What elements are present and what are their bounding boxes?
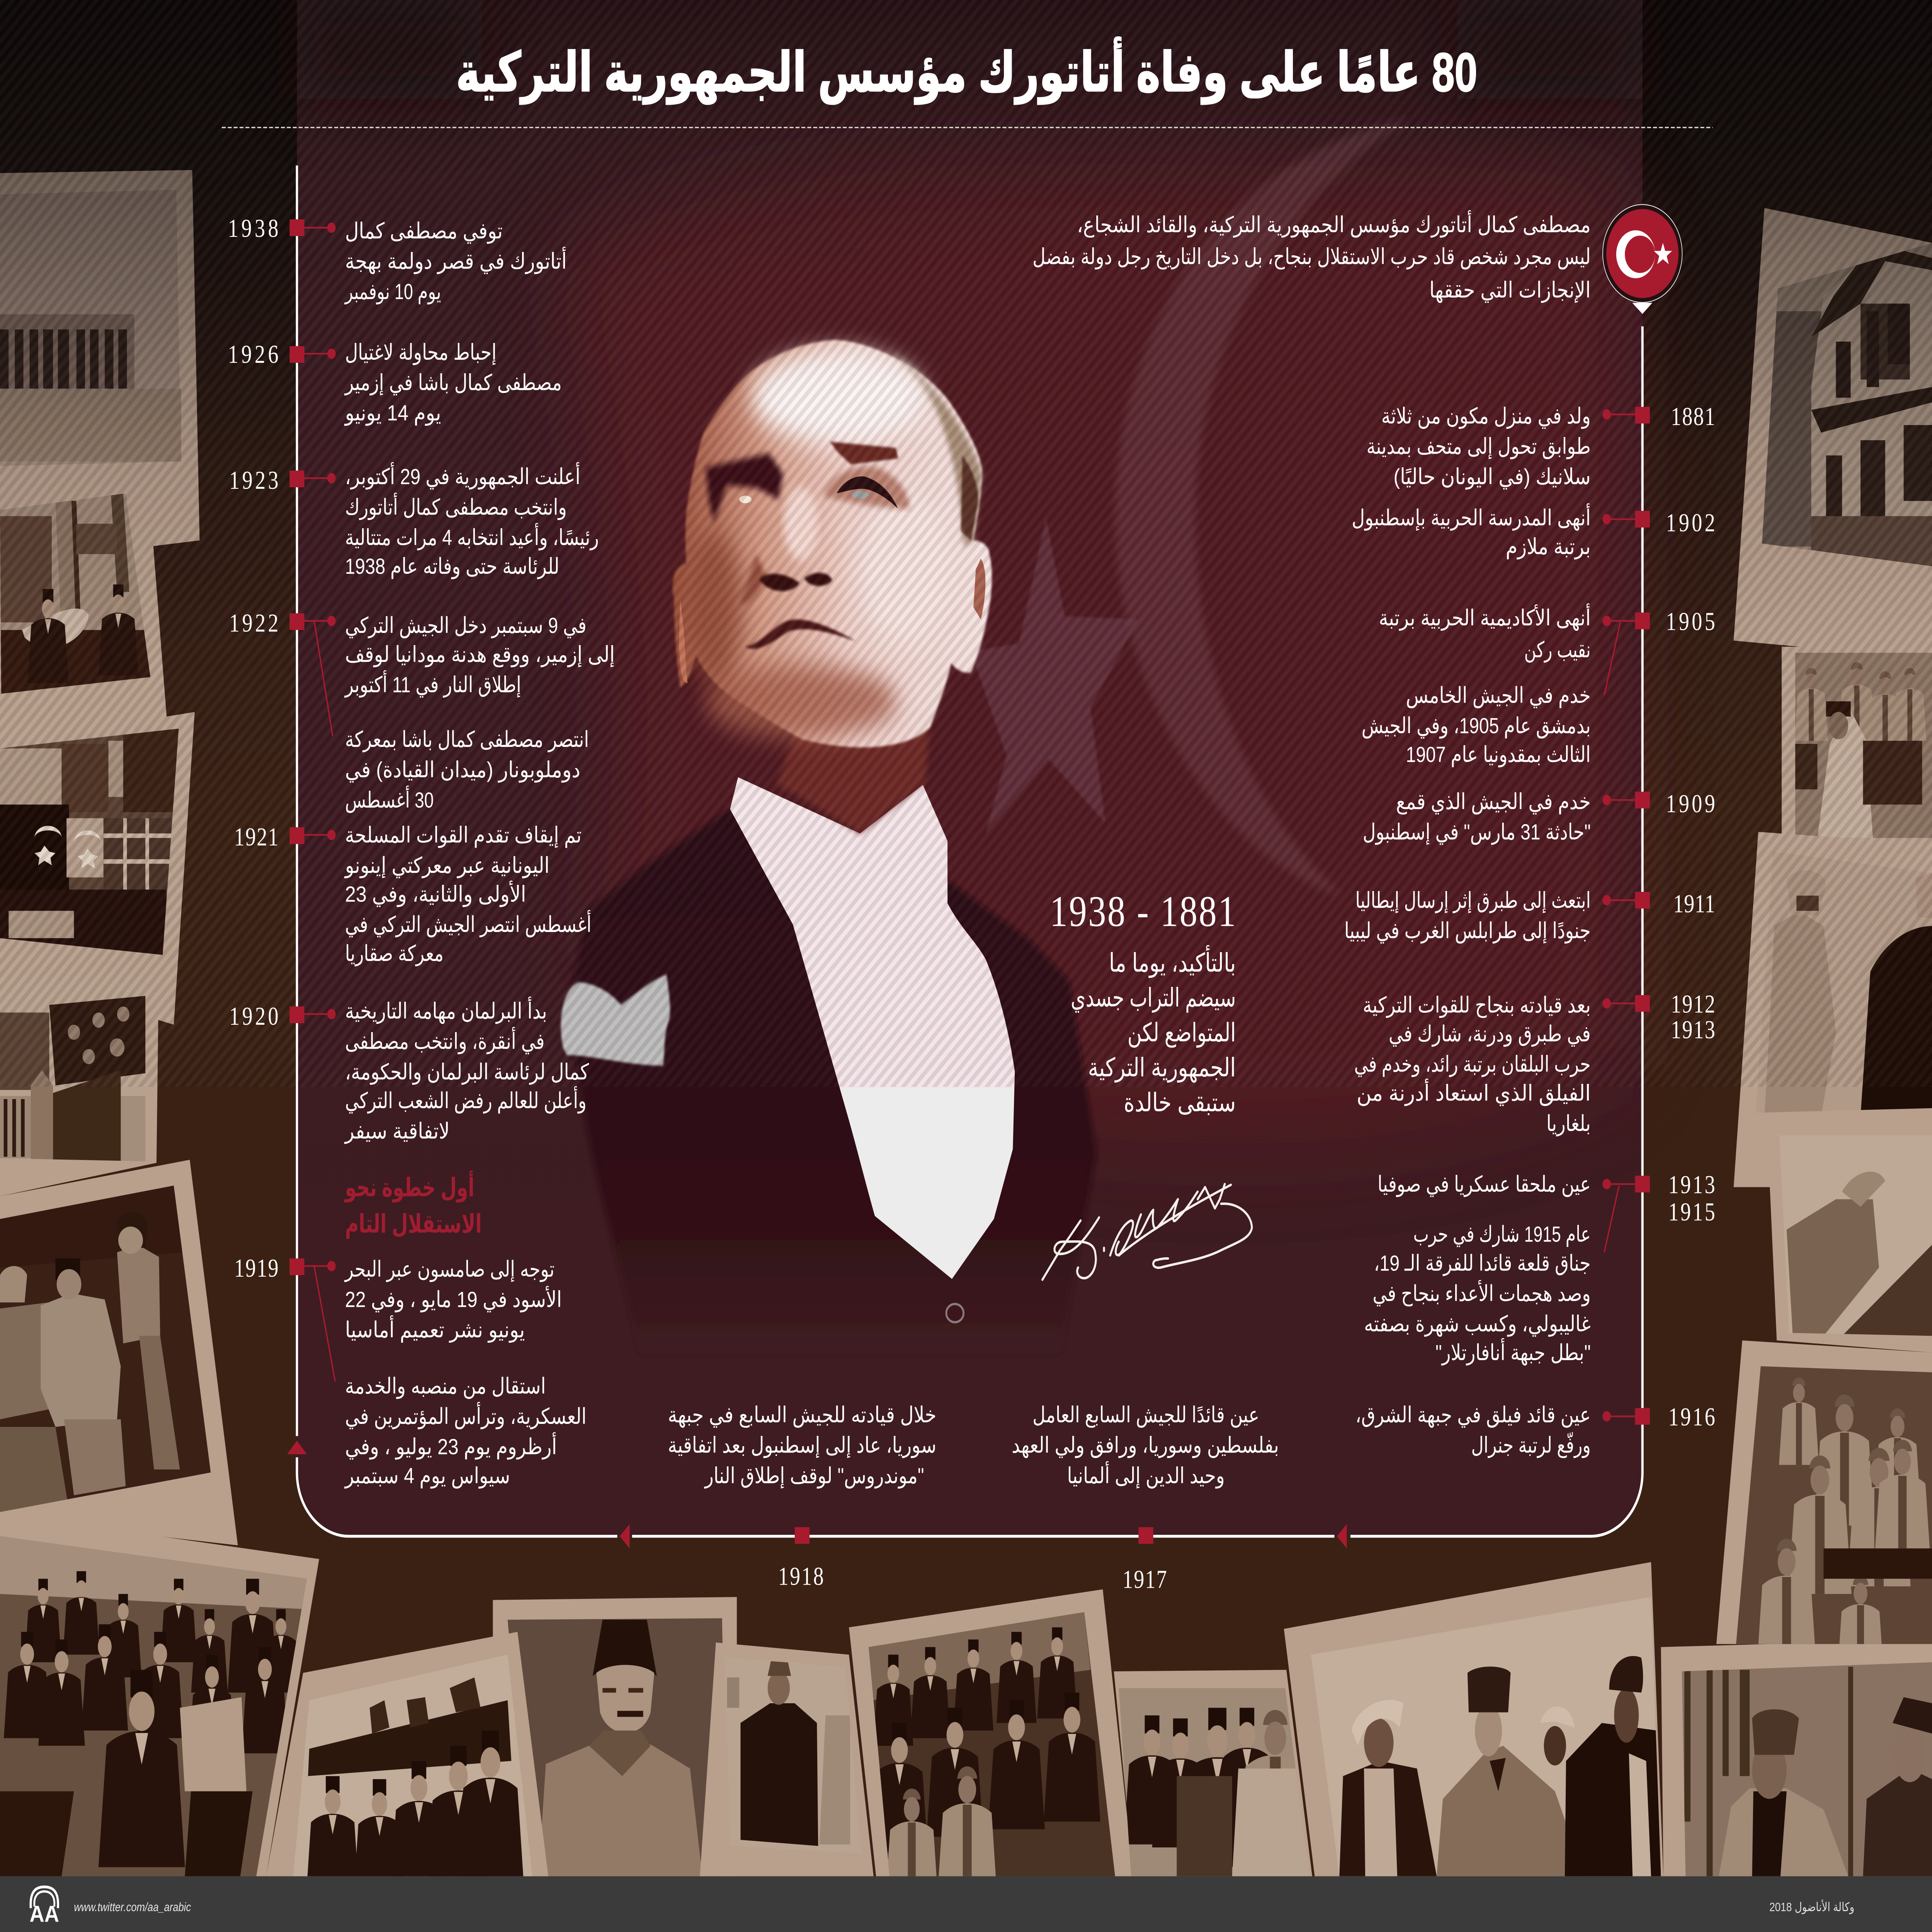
text block: 1881: طوابق تحول إلى متحف بمدينة bbox=[1366, 434, 1591, 459]
year labels bottom: 1917 bbox=[1122, 1565, 1167, 1594]
quote years: 1938 - 1881 bbox=[1050, 888, 1236, 936]
quote text: ستبقى خالدة bbox=[1124, 1088, 1236, 1117]
text block: 1923 bbox=[345, 462, 599, 579]
quote text: سيضم التراب جسدي bbox=[1071, 983, 1236, 1013]
text block: 1919: العسكرية، وترأس المؤتمرين في bbox=[345, 1402, 587, 1429]
text block: 1921: معركة صقاريا bbox=[345, 941, 444, 966]
photo: soldiers in Libya bbox=[1734, 832, 1932, 1187]
text block: 1912-1913: بعد قيادته بنجاح للقوات التركية bbox=[1363, 993, 1591, 1018]
quote text: بالتأكيد، يوما ما bbox=[1109, 945, 1236, 978]
photo: group of officers with dark hats bbox=[849, 1589, 1134, 1905]
text block: 1905 bbox=[1362, 604, 1591, 767]
year labels right: 1911 bbox=[1673, 890, 1715, 918]
text block: 1916: ورفّع لرتبة جنرال bbox=[1471, 1432, 1591, 1458]
left timeline markers bbox=[289, 219, 336, 1381]
text block: 1905: نقيب ركن bbox=[1524, 638, 1591, 663]
text block: 1909: "حادثة 31 مارس" في إسطنبول bbox=[1363, 820, 1591, 845]
year labels left bbox=[228, 214, 279, 1282]
year labels left: 1920 bbox=[229, 1002, 279, 1031]
text block: 1922 bbox=[344, 613, 615, 813]
quote text: المتواضع لكن bbox=[1128, 1018, 1236, 1048]
footer link: www.twitter.com/aa_arabic bbox=[74, 1901, 191, 1914]
text block: 1919: الأسود في 19 مايو ، وفي 22 bbox=[345, 1286, 562, 1313]
intro text: ليس مجرد شخص قاد حرب الاستقلال بنجاح، بل دخل التاريخ رجل دولة بفضل bbox=[1032, 244, 1591, 270]
text block: 1881: ولد في منزل مكون من ثلاثة bbox=[1381, 403, 1591, 429]
text block: 1920: كمال لرئاسة البرلمان والحكومة، bbox=[345, 1060, 589, 1085]
text block: 1923: رئيسًا، وأعيد انتخابه 4 مرات متتالية bbox=[345, 523, 599, 551]
text block: 1911: جنودًا إلى طرابلس الغرب في ليبيا bbox=[1344, 918, 1591, 944]
right timeline markers bbox=[1602, 407, 1650, 1425]
year labels left: 1921 bbox=[234, 823, 279, 852]
text block: 1913-1915: "بطل جبهة أنافارتلار" bbox=[1435, 1338, 1591, 1366]
text block: 1923: للرئاسة حتى وفاته عام 1938 bbox=[345, 554, 560, 579]
text block: 1913-1915: جناق قلعة قائدا للفرقة الـ 19، bbox=[1374, 1251, 1591, 1276]
text block: 1938: يوم 10 نوفمبر bbox=[344, 279, 441, 304]
footer credit: وكالة الأناضول 2018 bbox=[1769, 1899, 1854, 1914]
text block: 1912-1913: بلغاريا bbox=[1546, 1111, 1591, 1136]
text block: 1926: مصطفى كمال باشا في إزمير bbox=[344, 370, 562, 396]
text block: 1909 bbox=[1363, 789, 1591, 845]
text block: 1938: أتاتورك في قصر دولمة بهجة bbox=[345, 247, 567, 274]
signature bbox=[1043, 1184, 1252, 1280]
heading: first step to full independence: أول خطوة نحو bbox=[344, 1170, 474, 1202]
text block: 1917: وحيد الدين إلى ألمانيا bbox=[1067, 1461, 1225, 1489]
text block: 1922: إلى إزمير، ووقع هدنة مودانيا لوقف bbox=[345, 642, 615, 667]
year labels right: 1881 bbox=[1671, 403, 1715, 431]
text block: 1902: برتبة ملازم bbox=[1506, 534, 1591, 560]
text block: 1918: سوريا، عاد إلى إسطنبول بعد اتفاقية bbox=[668, 1433, 936, 1458]
text block: 1917: عين قائدًا للجيش السابع العامل bbox=[1032, 1403, 1259, 1428]
year labels right: 1902 bbox=[1666, 509, 1715, 537]
text block: 1912-1913: في طبرق ودرنة، شارك في bbox=[1389, 1021, 1591, 1047]
text block: 1919: سيواس يوم 4 سبتمبر bbox=[344, 1463, 510, 1489]
timeline arrows bbox=[287, 1440, 1347, 1548]
year labels left: 1922 bbox=[229, 609, 279, 638]
photo: soldier in trench bbox=[1767, 1108, 1932, 1352]
text block: 1913-1915: عين ملحقا عسكريا في صوفيا bbox=[1378, 1172, 1591, 1197]
text block: 1919: توجه إلى صامسون عبر البحر bbox=[344, 1257, 554, 1282]
timeline line bbox=[297, 165, 1643, 1536]
intro text: مصطفى كمال أتاتورك مؤسس الجمهورية التركية، والقائد الشجاع، bbox=[1077, 210, 1591, 238]
text block: 1921: أغسطس انتصر الجيش التركي في bbox=[345, 910, 592, 937]
photo: parliament chamber bbox=[0, 956, 159, 1196]
text block: 1921: الأولى والثانية، وفي 23 bbox=[345, 881, 526, 907]
text block: 1916: عين قائد فيلق في جبهة الشرق، bbox=[1355, 1403, 1591, 1428]
year labels left: 1938 bbox=[228, 214, 279, 243]
text block: 1921: اليونانية عبر معركتي إينونو bbox=[344, 853, 549, 878]
text block: 1913-1915: غاليبولي، وكسب شهرة بصفته bbox=[1364, 1311, 1591, 1337]
text block: 1923: أعلنت الجمهورية في 29 أكتوبر، bbox=[345, 462, 580, 490]
photo: walking officers bbox=[0, 1160, 238, 1545]
text block: 1918: "موندروس" لوقف إطلاق النار bbox=[704, 1463, 924, 1489]
text block: 1881: سلانيك (في اليونان حاليًا) bbox=[1394, 464, 1591, 490]
photo: leader and officer at wooden wall bbox=[1661, 1639, 1932, 1876]
text block: 1919: استقال من منصبه والخدمة bbox=[345, 1374, 546, 1399]
year labels bottom bbox=[778, 1562, 1167, 1594]
photo: funeral catafalque with guards bbox=[0, 477, 168, 748]
text block: 1920 bbox=[344, 997, 589, 1144]
text block: 1919: أرظروم يوم 23 يوليو ، وفي bbox=[345, 1432, 557, 1460]
year labels bottom: 1918 bbox=[778, 1562, 824, 1591]
text block: 1913-1915: عام 1915 شارك في حرب bbox=[1413, 1222, 1591, 1247]
photo: leader in trench coat with tribal elders bbox=[1284, 1562, 1663, 1876]
year labels right: 1915 bbox=[1668, 1198, 1715, 1226]
waving Turkish flag background bbox=[297, 0, 1643, 1144]
year labels left: 1926 bbox=[228, 340, 279, 369]
title: 80 عامًا على وفاة أتاتورك مؤسس الجمهورية التركية bbox=[456, 37, 1477, 105]
intro text bbox=[1032, 210, 1591, 303]
photo: Anitkabir mausoleum bbox=[0, 170, 200, 565]
year labels right: 1912 bbox=[1671, 990, 1715, 1019]
photo: officers at desk bbox=[1782, 647, 1932, 850]
photo: officer portrait with fez bbox=[493, 1597, 737, 1876]
footer bar bbox=[0, 1876, 1932, 1932]
text block: 1920: بدأ البرلمان مهامه التاريخية bbox=[345, 997, 547, 1024]
quote text: الجمهورية التركية bbox=[1088, 1053, 1236, 1083]
text block: 1922: إطلاق النار في 11 أكتوبر bbox=[344, 670, 521, 698]
top shadow over side areas bbox=[0, 0, 1932, 668]
photo: Atatürk birth house bbox=[1734, 208, 1932, 659]
text block: 1909: خدم في الجيش الذي قمع bbox=[1396, 789, 1591, 815]
quote text bbox=[1071, 945, 1236, 1117]
text block: 1917: بفلسطين وسوريا، ورافق ولي العهد bbox=[1012, 1433, 1279, 1458]
text block: 1921 bbox=[344, 823, 592, 966]
text block: 1920: في أنقرة، وانتخب مصطفى bbox=[345, 1027, 544, 1054]
year labels left: 1923 bbox=[229, 466, 279, 495]
text block: 1919: يونيو نشر تعميم أماسيا bbox=[345, 1315, 525, 1343]
text block: 1922: دوملوبونار (ميدان القيادة) في bbox=[345, 757, 580, 783]
heading: first step to full independence bbox=[344, 1170, 482, 1239]
text block: 1938 bbox=[344, 218, 567, 304]
text block: 1912-1913 bbox=[1354, 993, 1591, 1136]
panel: central timeline background bbox=[297, 0, 1643, 1536]
text block: 1912-1913: حرب البلقان برتبة رائد، وخدم في bbox=[1354, 1052, 1591, 1077]
text block: 1905: الثالث بمقدونيا عام 1907 bbox=[1406, 742, 1591, 767]
text block: 1902: أنهى المدرسة الحربية بإسطنبول bbox=[1352, 503, 1591, 531]
text block: 1912-1913: الفيلق الذي استعاد أدرنة من bbox=[1357, 1078, 1591, 1106]
text block: 1916 bbox=[1355, 1403, 1591, 1458]
text block: 1902 bbox=[1352, 503, 1591, 560]
text block: 1905: خدم في الجيش الخامس bbox=[1406, 683, 1591, 708]
intro text: الإنجازات التي حققها bbox=[1429, 277, 1591, 303]
photo: officer in dark coat bbox=[700, 1643, 874, 1876]
text block: 1926: إحباط محاولة لاغتيال bbox=[345, 340, 497, 365]
title divider bbox=[222, 127, 1713, 128]
text block: 1911: ابتعث إلى طبرق إثر إرسال إيطاليا bbox=[1355, 888, 1591, 913]
text block: 1922: في 9 سبتمبر دخل الجيش التركي bbox=[345, 613, 587, 639]
text block: 1921: تم إيقاف تقدم القوات المسلحة bbox=[345, 823, 582, 848]
photo: officers with fur hats bbox=[1114, 1670, 1312, 1876]
text block: 1920: وأعلن للعالم رفض الشعب التركي bbox=[345, 1086, 587, 1114]
text block: 1918: خلال قيادته للجيش السابع في جبهة bbox=[668, 1403, 936, 1428]
text block: 1922: انتصر مصطفى كمال باشا بمعركة bbox=[345, 727, 589, 752]
icon: Anadolu Agency logo bbox=[30, 1887, 59, 1927]
portrait of Atatürk bbox=[561, 340, 1097, 1351]
year labels right: 1909 bbox=[1666, 790, 1715, 818]
text block: 1913-1915: وصد هجمات الأعداء بنجاح في bbox=[1372, 1280, 1591, 1306]
text block: 1923: وانتخب مصطفى كمال أتاتورك bbox=[345, 493, 567, 520]
text block: 1938: توفي مصطفى كمال bbox=[345, 218, 503, 244]
flag pin icon bbox=[1602, 204, 1682, 314]
year labels left: 1919 bbox=[234, 1254, 279, 1282]
year labels right: 1913 bbox=[1671, 1016, 1715, 1044]
photo: soldiers group bottom left bbox=[0, 1514, 319, 1876]
text block: 1919 bbox=[344, 1257, 587, 1489]
year labels right: 1905 bbox=[1666, 607, 1715, 636]
text block: 1926: يوم 14 يونيو bbox=[344, 401, 441, 426]
icon: Anadolu Agency logo: AA bbox=[30, 1901, 59, 1927]
text block: 1920: لاتفاقية سيفر bbox=[344, 1119, 450, 1144]
text block: 1911 bbox=[1344, 888, 1591, 944]
photo: helmeted officers group bbox=[1716, 1340, 1932, 1677]
year labels right: 1913 bbox=[1668, 1171, 1715, 1199]
text block: 1926 bbox=[344, 340, 562, 426]
year labels right: 1916 bbox=[1668, 1403, 1715, 1431]
text block: 1905: أنهى الأكاديمية الحربية برتبة bbox=[1379, 604, 1591, 631]
heading: first step to full independence: الاستقلال التام bbox=[345, 1209, 482, 1239]
text block: 1905: بدمشق عام 1905، وفي الجيش bbox=[1362, 713, 1591, 739]
text block: 1918 bbox=[668, 1403, 936, 1489]
text block: 1881 bbox=[1366, 403, 1591, 490]
diagonal stripe overlay bbox=[0, 0, 1932, 1087]
photo: assembly with Turkish flags bbox=[0, 712, 195, 1025]
photo: group in dark suits bbox=[266, 1632, 548, 1898]
text block: 1917 bbox=[1012, 1403, 1279, 1489]
text block: 1913-1915 bbox=[1364, 1172, 1591, 1366]
year labels right bbox=[1666, 403, 1715, 1431]
text block: 1922: 30 أغسطس bbox=[345, 786, 434, 813]
